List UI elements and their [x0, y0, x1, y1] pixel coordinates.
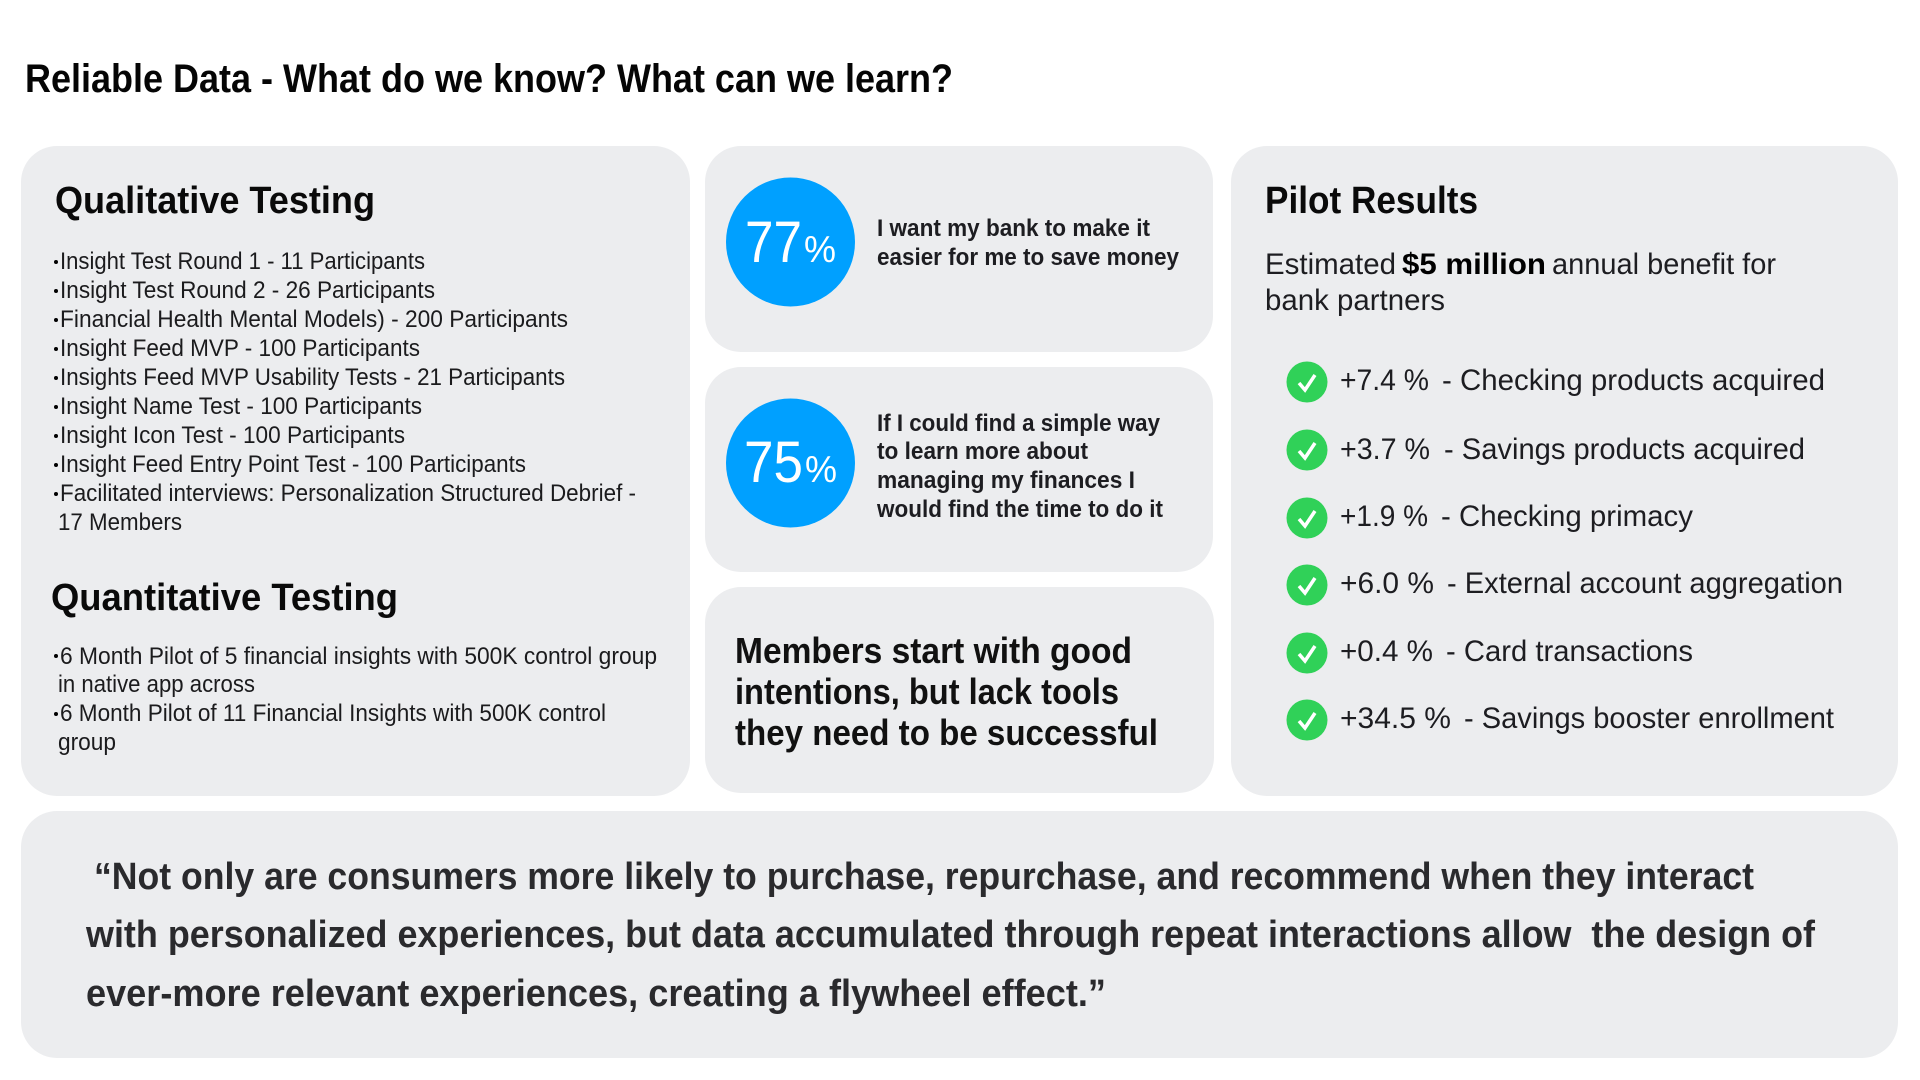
result: card transactions	[1286, 632, 1693, 674]
list: qualitative tests	[54, 248, 636, 536]
result: savings products	[1286, 430, 1805, 470]
result: external account aggregation	[1286, 564, 1843, 606]
result: card transactions: - Card transactions	[1446, 635, 1693, 668]
result: checking primacy	[1286, 498, 1693, 538]
statement: save money: I want my bank to make it	[877, 215, 1150, 242]
result: checking products	[1286, 362, 1825, 402]
result: checking products: +7.4 %	[1340, 364, 1429, 397]
list: qualitative tests: Insight Feed Entry Point Test - 100 Participants	[60, 451, 526, 478]
estimated benefit text: bank partners	[1265, 284, 1445, 317]
statement: learn about finances: managing my finances I	[877, 467, 1135, 494]
statement: save money	[877, 215, 1180, 271]
heading: pilot results: Pilot Results	[1265, 180, 1478, 222]
list: qualitative tests: Financial Health Mental Models) - 200 Participants	[60, 306, 568, 333]
statement text: Members start with good	[735, 630, 1132, 671]
quote text	[85, 856, 1815, 1015]
list: qualitative tests: Insight Test Round 1 - 11 Participants	[60, 248, 425, 275]
panel: qualitative and quantitative testing	[21, 146, 690, 796]
estimated benefit text: annual benefit for	[1552, 248, 1776, 281]
statement: learn about finances: If I could find a simple way	[877, 410, 1161, 437]
panel: 77 percent stat	[705, 146, 1213, 352]
result: checking primacy: +1.9 %	[1340, 500, 1428, 533]
list: quantitative tests: group	[58, 729, 116, 756]
list: quantitative tests: 6 Month Pilot of 11 Financial Insights with 500K control	[60, 700, 606, 727]
result: checking primacy: - Checking primacy	[1441, 500, 1693, 533]
result: checking products: - Checking products acquired	[1442, 364, 1825, 397]
heading: qualitative testing: Qualitative Testing	[55, 180, 375, 222]
heading: quantitative testing: Quantitative Testing	[51, 577, 398, 619]
result: savings products: +3.7 %	[1340, 433, 1430, 466]
statement text: they need to be successful	[735, 712, 1158, 753]
stat circle: 75%: 75	[744, 430, 803, 495]
panel: pilot results	[1231, 146, 1898, 796]
result: savings booster enrollment: - Savings booster enrollment	[1464, 702, 1835, 735]
list: qualitative tests: Insight Name Test - 100 Participants	[60, 393, 422, 420]
panel: 75 percent stat	[705, 367, 1213, 572]
panel: quote	[21, 811, 1898, 1058]
result: savings booster enrollment	[1286, 700, 1835, 740]
stat circle: 77%: %	[804, 229, 836, 270]
result: card transactions: +0.4 %	[1340, 635, 1433, 668]
result: external account aggregation: +6.0 %	[1340, 567, 1434, 600]
statement: learn about finances: to learn more about	[877, 438, 1088, 465]
quote text: ever-more relevant experiences, creating a flywheel effect.”	[86, 973, 1106, 1015]
stat circle: 77%: 77	[745, 210, 802, 275]
statement: learn about finances	[876, 410, 1163, 523]
panel: members statement	[705, 587, 1214, 793]
list: qualitative tests: Facilitated interviews: Personalization Structured Debrief -	[60, 480, 636, 507]
list: qualitative tests: Insight Test Round 2 - 26 Participants	[60, 277, 435, 304]
quote text: “Not only are consumers more likely to purchase, repurchase, and recommend when they interact	[94, 856, 1754, 898]
list: qualitative tests: Insights Feed MVP Usability Tests - 21 Participants	[60, 364, 565, 391]
result: external account aggregation: - External account aggregation	[1447, 567, 1843, 600]
title: Reliable Data - What do we know? What can we learn?	[25, 57, 953, 101]
quote text: with personalized experiences, but data accumulated through repeat interactions allow the design of	[85, 914, 1815, 956]
list: quantitative tests: in native app across	[58, 671, 255, 698]
list: qualitative tests: 17 Members	[58, 509, 182, 536]
estimated benefit text: $5 million	[1402, 248, 1546, 281]
stat circle: 77%	[726, 178, 855, 306]
list: quantitative tests: 6 Month Pilot of 5 financial insights with 500K control group	[60, 643, 657, 670]
result: savings products: - Savings products acquired	[1444, 433, 1805, 466]
result: savings booster enrollment: +34.5 %	[1340, 702, 1451, 735]
statement text	[735, 630, 1158, 753]
list: qualitative tests: Insight Feed MVP - 100 Participants	[60, 335, 420, 362]
statement: learn about finances: would find the time to do it	[876, 496, 1163, 523]
stat circle: 75%: %	[805, 449, 837, 490]
estimated benefit text	[1265, 248, 1776, 317]
list: quantitative tests	[54, 643, 657, 756]
list: qualitative tests: Insight Icon Test - 100 Participants	[60, 422, 405, 449]
estimated benefit text: Estimated	[1265, 248, 1396, 281]
statement: save money: easier for me to save money	[877, 244, 1180, 271]
statement text: intentions, but lack tools	[735, 671, 1119, 712]
stat circle: 75%	[726, 398, 855, 528]
